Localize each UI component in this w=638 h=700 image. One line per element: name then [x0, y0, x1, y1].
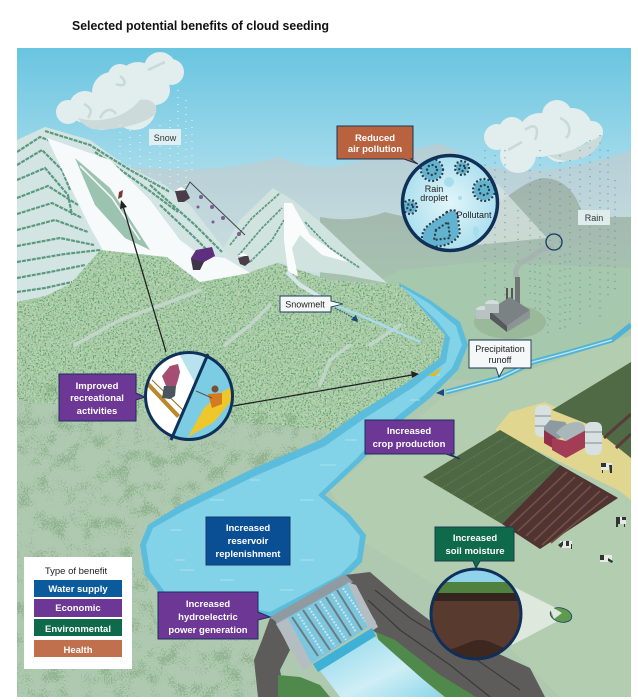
label: increased reservoir replenishment: replenishment — [216, 549, 281, 560]
label: increased reservoir replenishment: Increased — [226, 523, 270, 534]
rainfall — [485, 135, 615, 335]
legend — [24, 557, 132, 669]
label: increased reservoir replenishment — [206, 517, 290, 565]
arrow: to kayak — [233, 371, 419, 406]
snowmelt label: Snowmelt — [285, 300, 325, 310]
label: reduced air pollution — [337, 126, 418, 164]
precipitation runoff label: runoff — [489, 355, 512, 365]
factory — [474, 277, 546, 339]
circle: rain droplets and pollutants: Pollutant — [456, 210, 492, 220]
runoff arrow — [436, 389, 444, 396]
rock, left of dam — [254, 618, 290, 697]
dam — [270, 574, 378, 672]
silo, left — [535, 405, 551, 437]
precipitation runoff label: Precipitation — [475, 344, 525, 354]
legend: economic: Economic — [55, 603, 101, 614]
label: improved recreational activities — [59, 374, 145, 421]
forest speckle — [17, 250, 447, 435]
ski lodge — [191, 247, 215, 270]
snowfall — [120, 90, 192, 215]
droplets — [404, 160, 494, 246]
label: reduced air pollution: Reduced — [355, 133, 395, 144]
snow label — [149, 129, 181, 145]
snow label: Snow — [154, 133, 177, 143]
water ripples — [170, 375, 440, 590]
kayak in river — [428, 367, 442, 376]
forest hillside — [17, 250, 370, 380]
ground sample ellipse — [549, 605, 573, 625]
label: increased hydroelectric power generation: power generation — [168, 625, 248, 636]
sky — [17, 48, 631, 170]
right meadow — [502, 335, 631, 380]
label: increased soil moisture: Increased — [453, 533, 497, 544]
label: increased hydroelectric power generation: hydroelectric — [178, 612, 238, 623]
cone: pollution view — [477, 183, 547, 245]
circle: rain droplets and pollutants — [402, 156, 498, 250]
cows — [558, 463, 626, 563]
legend: water supply: Water supply — [48, 584, 108, 595]
rock bank — [345, 572, 545, 697]
snowmelt stream — [287, 272, 420, 342]
label: reduced air pollution: air pollution — [348, 144, 402, 155]
green foothills — [442, 320, 631, 380]
ski run — [47, 138, 250, 282]
upper field — [552, 362, 631, 458]
meadow speckle — [17, 380, 357, 697]
label: increased soil moisture: soil moisture — [445, 546, 505, 557]
crop field brown — [502, 465, 618, 549]
label: increased reservoir replenishment: reservoir — [228, 536, 269, 547]
label: increased hydroelectric power generation: Increased — [186, 599, 230, 610]
factory smoke — [516, 247, 552, 277]
pollutant rims — [403, 159, 495, 247]
distant mountains — [130, 143, 631, 277]
title: Selected potential benefits of cloud seeding — [72, 18, 329, 33]
green strip — [376, 632, 476, 697]
legend: Type of benefit — [45, 566, 108, 577]
base meadow — [17, 400, 560, 697]
tributary — [446, 325, 631, 392]
crop rows — [432, 436, 560, 518]
legend: health: Health — [63, 645, 93, 656]
label: improved recreational activities: recreational — [70, 393, 124, 404]
cone: soil view — [512, 587, 556, 645]
furrows — [510, 472, 608, 545]
circle: recreation — [146, 350, 240, 445]
tree island on run — [75, 158, 150, 250]
river — [140, 282, 468, 618]
grass left of lower water — [278, 675, 330, 697]
barn — [544, 420, 586, 458]
label: increased soil moisture — [435, 527, 514, 568]
cloud, right — [484, 100, 603, 173]
farm ground — [495, 402, 631, 500]
ski lift — [175, 182, 250, 266]
label: increased crop production: crop production — [373, 439, 446, 450]
cloud, left — [56, 52, 184, 130]
arrow: to skier — [120, 200, 166, 352]
rain label — [578, 210, 610, 225]
legend: environmental: Environmental — [45, 624, 111, 635]
crop field green — [423, 430, 560, 524]
rain label: Rain — [585, 213, 603, 223]
snow mountain, left — [17, 127, 250, 302]
skier on slope — [118, 190, 123, 199]
circle: rain droplets and pollutants: droplet — [420, 193, 448, 203]
circle: rain droplets and pollutants: Rain — [425, 184, 443, 194]
label: improved recreational activities: Improved — [76, 381, 119, 392]
lower water — [318, 634, 443, 697]
snowmelt label — [280, 296, 358, 322]
forest highlights — [17, 250, 447, 435]
label: increased crop production: Increased — [387, 426, 431, 437]
label: increased crop production — [365, 420, 460, 459]
silo, right — [585, 422, 602, 455]
grey mid mountain — [320, 178, 631, 283]
circle: soil moisture — [430, 568, 522, 660]
snow mountain, right — [222, 188, 387, 283]
label: increased hydroelectric power generation — [158, 592, 270, 639]
precipitation runoff label — [469, 340, 531, 377]
magnifier ring on smoke — [546, 234, 562, 250]
forest clearings — [75, 290, 400, 385]
label: improved recreational activities: activities — [77, 406, 117, 417]
